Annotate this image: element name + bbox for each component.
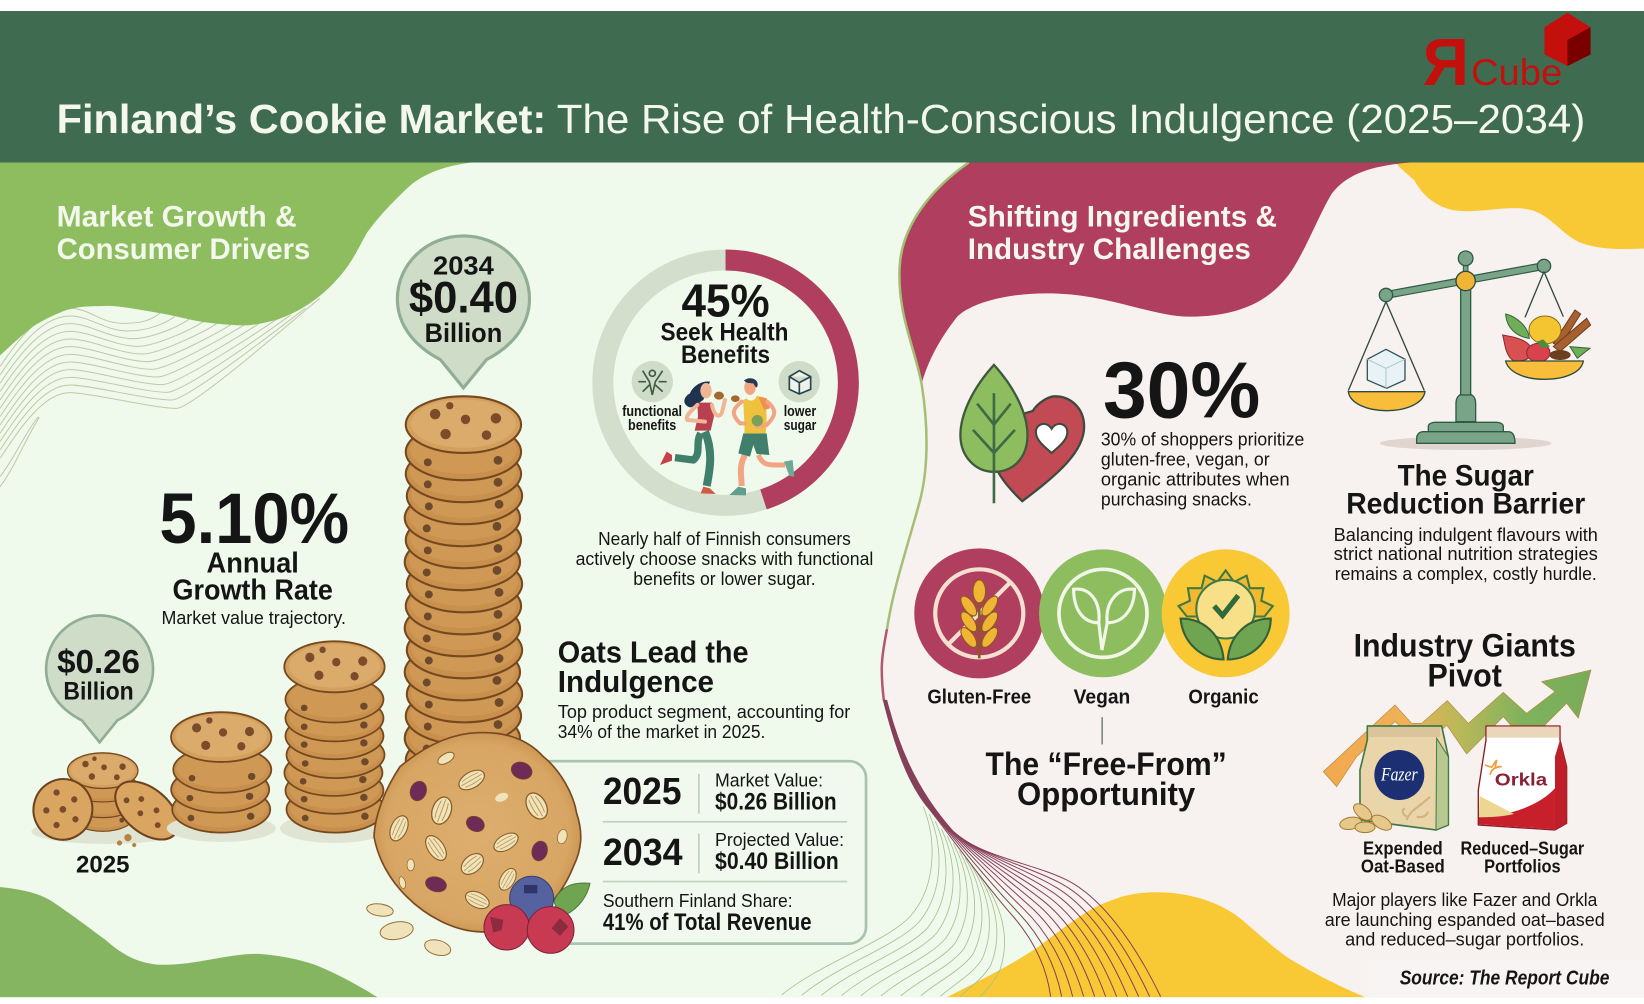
row: southern finland share — [603, 890, 812, 936]
cookie pile: 2025 — [27, 753, 189, 851]
heading: oats lead: Indulgence — [558, 665, 714, 699]
heading: market growth: Market Growth & — [57, 200, 297, 233]
icon: organic badge — [1162, 549, 1290, 677]
heading: industry giants pivot: Pivot — [1427, 658, 1502, 694]
bottom yellow blob — [947, 892, 1365, 997]
title: Finland’s Cookie Market: — [57, 96, 546, 142]
illustration: two runners eating snacks — [632, 361, 820, 495]
icon: lower sugar — [779, 361, 820, 402]
labels: bag captions: Portfolios — [1484, 855, 1561, 876]
heading: free-from opportunity: The “Free-From” — [986, 746, 1227, 782]
logo: RCube: Я — [1423, 25, 1469, 100]
bottom left green blob — [0, 887, 377, 997]
labels: functional benefits and lower sugar: lower — [784, 404, 816, 420]
row: 2034: $0.40 Billion — [715, 848, 839, 875]
left top green blob — [0, 163, 472, 355]
scattered oats — [366, 902, 452, 958]
magenta header blob — [899, 163, 1410, 384]
heading: sugar reduction barrier — [1346, 459, 1585, 521]
row: 2034: Projected Value: — [715, 829, 844, 850]
heading: industry giants pivot — [1354, 627, 1576, 694]
text: major players: Major players like Fazer and Orkla — [1332, 889, 1598, 910]
heading: industry giants pivot: Industry Giants — [1354, 627, 1576, 663]
row: southern finland share: 41% of Total Revenue — [603, 909, 812, 936]
labels: functional benefits and lower sugar: functional — [622, 404, 682, 420]
row: southern finland share: Southern Finland Share: — [603, 890, 793, 911]
heading: shifting ingredients — [968, 200, 1277, 266]
row: 2034 — [603, 829, 844, 875]
logo: RCube: Cube — [1471, 52, 1562, 93]
title — [57, 96, 1585, 142]
illustration: balance scale — [1348, 251, 1591, 450]
labels: functional benefits and lower sugar: sugar — [784, 418, 816, 434]
row: 2025: Market Value: — [715, 769, 823, 790]
labels: bag captions: Expended — [1363, 837, 1443, 858]
icon: leaf and heart — [960, 365, 1084, 503]
sugar cube — [1367, 349, 1405, 388]
stat: 30 percent: 30% — [1103, 345, 1260, 434]
label: 2025: 2025 — [76, 851, 129, 878]
labels: free-from attributes: Organic — [1188, 687, 1259, 709]
Orkla bag — [1478, 726, 1567, 830]
icon: functional benefits — [632, 361, 673, 402]
row: 2034: 2034 — [603, 831, 683, 873]
text: top product segment — [558, 701, 850, 742]
text: sugar barrier body: remains a complex, costly hurdle. — [1335, 563, 1597, 584]
header band — [0, 11, 1644, 163]
text: nearly half of consumers — [576, 528, 873, 589]
row: 2025 — [603, 769, 837, 815]
stat: 30 percent: organic attributes when — [1101, 468, 1290, 489]
panel: market values table — [524, 761, 866, 944]
donut chart: 45 percent: 45% — [682, 275, 770, 327]
text: major players: are launching espanded oat–based — [1325, 909, 1605, 930]
Orkla bag: Orkla — [1495, 769, 1548, 789]
text: sugar barrier body — [1334, 524, 1598, 584]
labels: bag captions: Reduced–Sugar — [1461, 837, 1585, 858]
stat: 30 percent: 30% of shoppers prioritize — [1101, 429, 1304, 450]
source note: Source: The Report Cube — [1400, 967, 1609, 989]
text: sugar barrier body: Balancing indulgent flavours with — [1334, 524, 1598, 545]
text: top product segment: 34% of the market in 2025. — [558, 721, 765, 742]
logo: RCube — [1423, 13, 1591, 100]
top right yellow blob — [1396, 163, 1644, 249]
panel divider curve — [882, 163, 969, 700]
oat cookie — [374, 733, 581, 932]
callout: 2034 value bubble: $0.40 — [409, 273, 518, 322]
text: nearly half of consumers: Nearly half of Finnish consumers — [598, 528, 851, 549]
heading: market growth — [57, 200, 310, 266]
callout: 2034 value bubble — [397, 236, 529, 388]
cookie stack: middle year — [167, 712, 276, 842]
labels: bag captions: Oat-Based — [1361, 855, 1445, 876]
illustration: pivot arrow and product bags — [1323, 670, 1591, 833]
wave line pattern left — [0, 298, 320, 487]
labels: free-from attributes: Gluten-Free — [927, 687, 1031, 709]
callout: 2025 value bubble: $0.26 — [57, 644, 140, 681]
donut chart: 45 percent: Seek Health — [661, 319, 788, 347]
text: nearly half of consumers: actively choose snacks with functional — [576, 548, 873, 569]
text: major players — [1325, 889, 1605, 950]
berries — [484, 876, 590, 953]
cookie stack: later year — [280, 641, 389, 843]
Fazer bag: Fazer — [1380, 765, 1418, 786]
stat: 30 percent: gluten-free, vegan, or — [1101, 449, 1270, 470]
heading: sugar reduction barrier: The Sugar — [1398, 459, 1534, 492]
callout: 2034 value bubble: 2034 — [433, 251, 494, 281]
heading: shifting ingredients: Shifting Ingredients & — [968, 200, 1277, 233]
text: nearly half of consumers: benefits or lower sugar. — [633, 568, 816, 589]
stat: 30 percent — [1101, 345, 1304, 509]
title: The Rise of Health-Conscious Indulgence (2025–2034) — [557, 96, 1585, 142]
cookie stack: 2034 — [405, 396, 522, 788]
heading: oats lead — [558, 636, 749, 699]
stat: annual growth rate: Growth Rate — [172, 574, 333, 606]
heading: oats lead: Oats Lead the — [558, 636, 749, 670]
heading: sugar reduction barrier: Reduction Barrier — [1346, 488, 1585, 521]
heading: free-from opportunity — [986, 746, 1227, 812]
heading: free-from opportunity: Opportunity — [1017, 776, 1195, 812]
stat: annual growth rate — [159, 479, 349, 628]
source note — [1367, 960, 1644, 997]
stat: annual growth rate: 5.10% — [159, 479, 349, 559]
connector line — [1101, 717, 1103, 744]
arrow: upward zigzag — [1323, 670, 1591, 787]
stat: 30 percent: purchasing snacks. — [1101, 488, 1252, 509]
heading: market growth: Consumer Drivers — [57, 233, 310, 266]
figure: woman — [660, 381, 725, 494]
fan line pattern — [782, 700, 1161, 997]
heading: shifting ingredients: Industry Challenges — [968, 233, 1251, 266]
figure: man — [729, 378, 794, 495]
donut chart: 45 percent: Benefits — [681, 341, 770, 369]
icon: gluten-free badge — [914, 548, 1044, 678]
callout: 2034 value bubble: Billion — [425, 317, 502, 348]
stat: annual growth rate: Market value trajectory. — [161, 607, 346, 628]
labels: functional benefits and lower sugar — [622, 404, 816, 434]
text: sugar barrier body: strict national nutrition strategies — [1334, 543, 1598, 564]
text: major players: and reduced–sugar portfolios. — [1345, 929, 1584, 950]
right panel background — [882, 163, 1644, 997]
labels: free-from attributes: Vegan — [1074, 687, 1130, 709]
fruit and spice bowl — [1503, 310, 1591, 379]
donut chart: 45 percent — [603, 260, 848, 505]
callout: 2025 value bubble — [46, 615, 153, 742]
callout: 2025 value bubble: Billion — [63, 677, 134, 705]
Fazer bag — [1339, 726, 1448, 833]
text: top product segment: Top product segment, accounting for — [558, 701, 850, 722]
icon: vegan badge — [1039, 549, 1167, 677]
row: 2025: 2025 — [603, 770, 682, 812]
labels: bag captions — [1361, 837, 1585, 876]
labels: functional benefits and lower sugar: benefits — [628, 418, 676, 434]
row: 2025: $0.26 Billion — [715, 788, 837, 815]
stat: annual growth rate: Annual — [207, 546, 299, 578]
labels: free-from attributes — [927, 687, 1259, 709]
illustration: large oat cookie with berries — [366, 733, 590, 958]
